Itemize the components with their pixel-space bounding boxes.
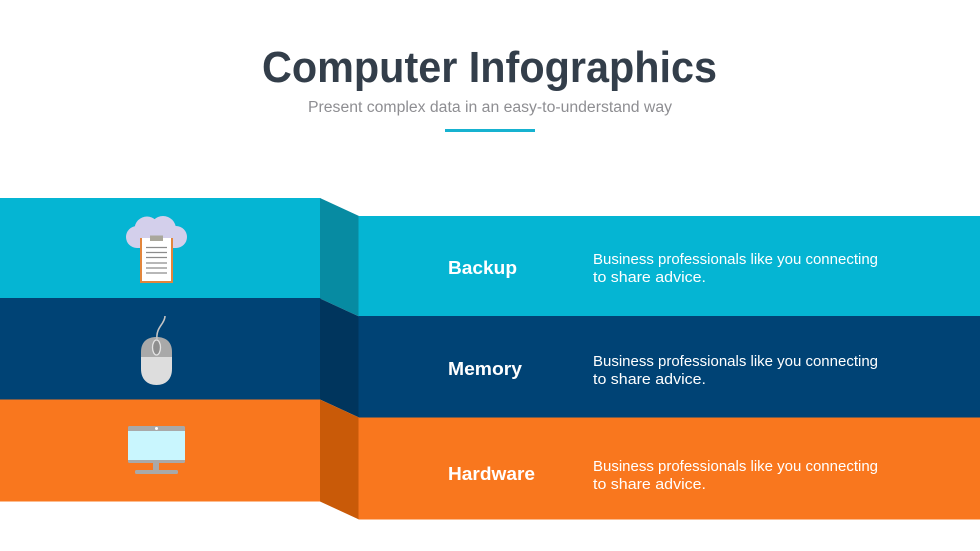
description: Memory: Business professionals like you connecting xyxy=(593,353,878,370)
fold: Memory xyxy=(320,298,359,418)
left panel: Backup xyxy=(0,198,320,298)
title: Computer Infographics xyxy=(262,43,717,92)
fold: Backup xyxy=(320,198,359,316)
right panel: Hardware xyxy=(358,418,980,520)
label: Memory: Memory xyxy=(448,358,523,379)
icon: cloud clipboard xyxy=(126,216,187,283)
fold: Hardware xyxy=(320,400,359,520)
description: Memory: to share advice. xyxy=(593,371,706,388)
subtitle: Present complex data in an easy-to-understand way xyxy=(308,99,672,116)
description: Hardware: Business professionals like you connecting xyxy=(593,458,878,475)
left panel: Memory xyxy=(0,298,320,400)
description: Backup: to share advice. xyxy=(593,269,706,286)
icon: monitor xyxy=(128,426,185,474)
description: Backup: Business professionals like you connecting xyxy=(593,251,878,268)
label: Hardware: Hardware xyxy=(448,463,535,484)
header xyxy=(262,43,717,132)
band: Hardware xyxy=(0,400,980,520)
icon: mouse xyxy=(141,316,172,385)
left panel: Hardware xyxy=(0,400,320,502)
band: Backup xyxy=(0,198,980,316)
band: Memory xyxy=(0,298,980,418)
title underline xyxy=(445,129,535,132)
right panel: Backup xyxy=(358,216,980,316)
label: Backup: Backup xyxy=(448,257,517,278)
right panel: Memory xyxy=(358,316,980,418)
description: Hardware: to share advice. xyxy=(593,476,706,493)
